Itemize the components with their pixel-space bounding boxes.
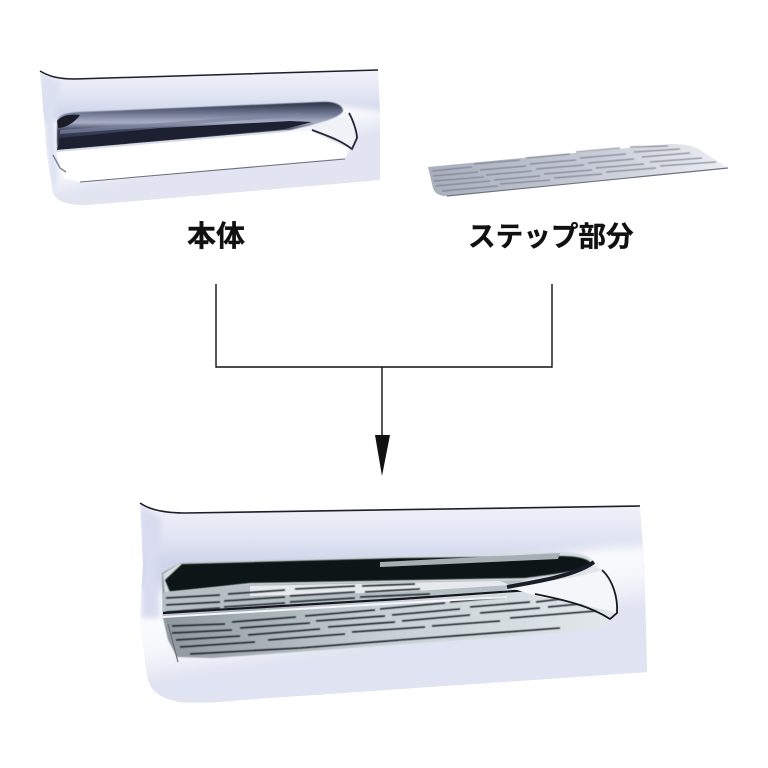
infographic: assembly diagram: [40, 69, 728, 703]
product photo: main body (本体): [40, 69, 380, 205]
connector lines joining both parts: [216, 284, 552, 367]
recessed tray: [162, 552, 617, 658]
product photo: assembled step: [140, 502, 647, 703]
product photo: step plate (ステップ部分): [428, 144, 728, 196]
label: 本体: 本体: [187, 220, 245, 253]
arrow pointing to the assembled product: [375, 367, 390, 476]
label: ステップ部分: ステップ部分: [468, 221, 634, 252]
